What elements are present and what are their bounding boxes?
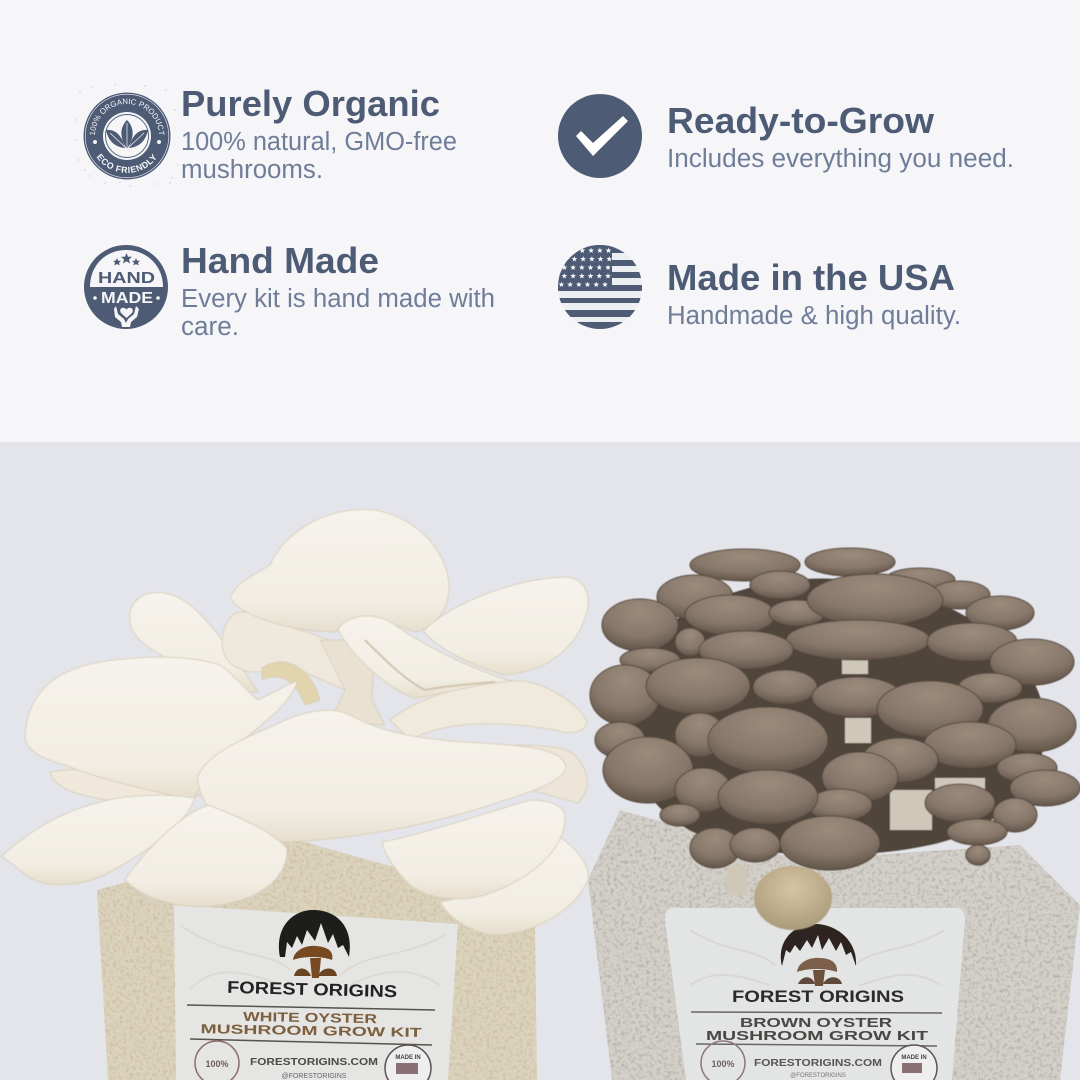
description: care.: [181, 313, 239, 341]
product label: @FORESTORIGINS: [282, 1073, 347, 1080]
description: Handmade & high quality.: [667, 302, 961, 330]
product label: MADE IN: [395, 1055, 421, 1061]
panel: photo background: [0, 442, 1080, 1080]
icon: organic seal: 100% ORGANIC PRODUCT: [90, 98, 164, 135]
product label: FOREST ORIGINS: [227, 978, 397, 1001]
icon: american flag: ★★★★★★: [558, 280, 610, 289]
grow bag: [97, 838, 537, 1080]
heading: Purely Organic: [181, 83, 440, 124]
product label: MUSHROOM GROW KIT: [200, 1021, 422, 1040]
feature: Hand Made: [84, 240, 495, 341]
icon: organic seal: [75, 84, 179, 187]
product label: MUSHROOM GROW KIT: [706, 1028, 928, 1043]
product label: BROWN OYSTER: [740, 1015, 893, 1030]
description: Every kit is hand made with: [181, 285, 495, 313]
description: Includes everything you need.: [667, 145, 1014, 173]
grow bag: [588, 810, 1080, 1080]
icon: organic seal: ECO FRIENDLY: [96, 154, 156, 173]
icon: hand made badge: MADE: [101, 290, 153, 307]
product label: [174, 905, 458, 1080]
product label: 100%: [205, 1059, 229, 1069]
product label: @FORESTORIGINS: [790, 1073, 846, 1079]
feature: Ready-to-Grow: [558, 94, 1014, 178]
logo: forest and mushroom: [781, 924, 856, 986]
product label: FORESTORIGINS.COM: [754, 1058, 882, 1069]
icon: american flag: ★★★★: [579, 246, 614, 255]
brown oyster mushroom cluster: [590, 548, 1080, 930]
icon: american flag: [558, 245, 642, 329]
product label: [665, 908, 965, 1080]
panel: top background: [0, 0, 1080, 442]
description: mushrooms.: [181, 156, 323, 184]
icon: hand made badge: [84, 245, 168, 329]
product label: MADE IN: [901, 1055, 927, 1061]
heading: Made in the USA: [667, 257, 955, 298]
heading: Hand Made: [181, 240, 379, 281]
white oyster mushroom cluster: [2, 509, 588, 935]
heading: Ready-to-Grow: [667, 100, 935, 141]
icon: hand made badge: HAND: [98, 270, 155, 287]
product label: 100%: [711, 1059, 735, 1069]
product label: FOREST ORIGINS: [732, 987, 904, 1006]
icon: check mark: [558, 94, 642, 178]
icon: american flag: ★★★★★★: [561, 272, 613, 280]
icon: american flag: ★★★★★: [571, 254, 615, 264]
feature: Purely Organic: [75, 83, 457, 187]
product: brown oyster mushroom grow kit: [588, 548, 1080, 1080]
feature: Made in the USA: [558, 245, 961, 330]
icon: american flag: ★★★★★★: [561, 263, 613, 272]
logo: forest and mushroom: [279, 910, 350, 978]
product label: FORESTORIGINS.COM: [250, 1057, 378, 1068]
product: white oyster mushroom grow kit: [2, 509, 588, 1080]
description: 100% natural, GMO-free: [181, 128, 457, 156]
product label: WHITE OYSTER: [243, 1009, 378, 1026]
